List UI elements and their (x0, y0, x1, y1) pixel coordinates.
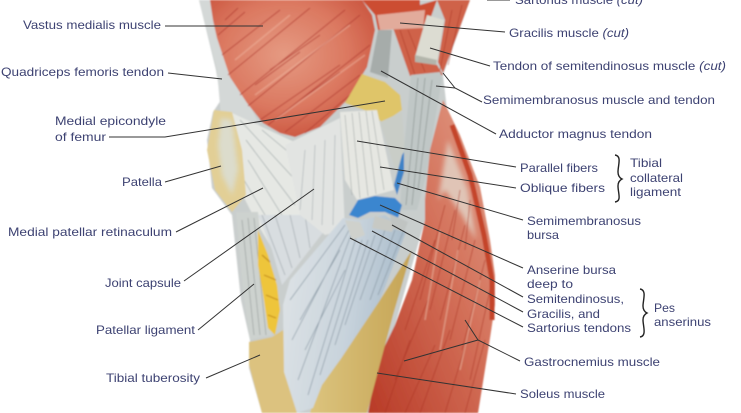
label: Medial epicondyle of femur: of femur (55, 130, 106, 144)
anatomical illustration of the knee (199, 0, 495, 413)
patella (207, 110, 246, 212)
label: Semimembranosus bursa: Semimembranosus (527, 214, 641, 228)
label: Oblique fibers: Oblique fibers (520, 181, 605, 195)
label: Tibial collateral ligament: collateral (630, 171, 683, 185)
leg silhouette base (199, 0, 470, 413)
sartorius muscle stump (362, 0, 437, 30)
femoral epicondyle (345, 74, 402, 123)
label: Anserine bursa deep to: deep to (527, 277, 573, 291)
label: Pes anserinus: anserinus (654, 315, 711, 329)
brace: tibial collateral ligament (615, 155, 622, 202)
label: Semitendinosus, Gracilis, and Sartorius tendons (527, 292, 631, 335)
label: Patellar ligament: Patellar ligament (96, 323, 196, 337)
patellar ligament (236, 212, 272, 340)
central capsule (285, 118, 345, 235)
quadriceps femoris tendon (199, 0, 295, 190)
label: Medial epicondyle of femur (55, 114, 166, 144)
label: Semitendinosus, Gracilis, and Sartorius tendons: Semitendinosus, (527, 292, 624, 306)
label: Semimembranosus bursa: bursa (527, 228, 559, 242)
anserine bursa (349, 196, 402, 218)
label: Parallel fibers: Parallel fibers (520, 161, 598, 175)
gracilis tendon stump (415, 15, 444, 63)
right labels (483, 0, 726, 401)
label: Medial patellar retinaculum: Medial patellar retinaculum (8, 225, 172, 239)
label: Anserine bursa deep to: Anserine bursa (527, 263, 616, 277)
joint capsule (258, 215, 325, 285)
vastus medialis muscle (210, 0, 375, 137)
label: Tibial tuberosity: Tibial tuberosity (106, 371, 200, 385)
label: Semitendinosus, Gracilis, and Sartorius tendons: Sartorius tendons (527, 321, 631, 335)
label: Pes anserinus (654, 301, 711, 329)
label: Tibial collateral ligament (630, 156, 683, 199)
label: Tibial collateral ligament: ligament (630, 185, 682, 199)
label: Anserine bursa deep to (527, 263, 616, 291)
label: Semimembranosus bursa (527, 214, 641, 242)
label: Gastrocnemius muscle: Gastrocnemius muscle (524, 355, 660, 369)
label: Tibial collateral ligament: Tibial (630, 156, 662, 170)
left labels (1, 18, 200, 385)
label: Patella: Patella (122, 175, 162, 189)
label: Pes anserinus: Pes (654, 301, 675, 315)
label: Adductor magnus tendon: Adductor magnus tendon (499, 127, 652, 141)
semimembranosus tendon (400, 72, 442, 210)
label: Vastus medialis muscle: Vastus medialis muscle (23, 18, 161, 32)
label: Gracilis muscle (cut): Gracilis muscle (cut) (509, 26, 629, 40)
gastrocnemius muscle (368, 100, 495, 413)
infrapatellar fat pad (258, 230, 280, 335)
tibial tuberosity (249, 330, 298, 413)
leader lines (109, 0, 523, 394)
pes anserinus tendons (283, 214, 408, 413)
adductor magnus tendon (370, 30, 392, 78)
label: Semitendinosus, Gracilis, and Sartorius tendons: Gracilis, and (527, 307, 600, 321)
brace: pes anserinus (640, 289, 647, 337)
tibial collateral ligament parallel fibers (340, 110, 405, 200)
tibia (310, 250, 412, 413)
muscles of posterior thigh (392, 0, 470, 76)
label: Medial epicondyle of femur: Medial epicondyle (55, 114, 166, 128)
label: Joint capsule: Joint capsule (105, 276, 181, 290)
semimembranosus bursa (394, 152, 404, 195)
label: Soleus muscle: Soleus muscle (520, 387, 605, 401)
label: Quadriceps femoris tendon: Quadriceps femoris tendon (1, 65, 164, 79)
medial patellar retinaculum (230, 112, 325, 270)
label: Tendon of semitendinosus muscle (cut): Tendon of semitendinosus muscle (cut) (493, 59, 726, 73)
label: Semimembranosus muscle and tendon: Semimembranosus muscle and tendon (483, 93, 715, 107)
